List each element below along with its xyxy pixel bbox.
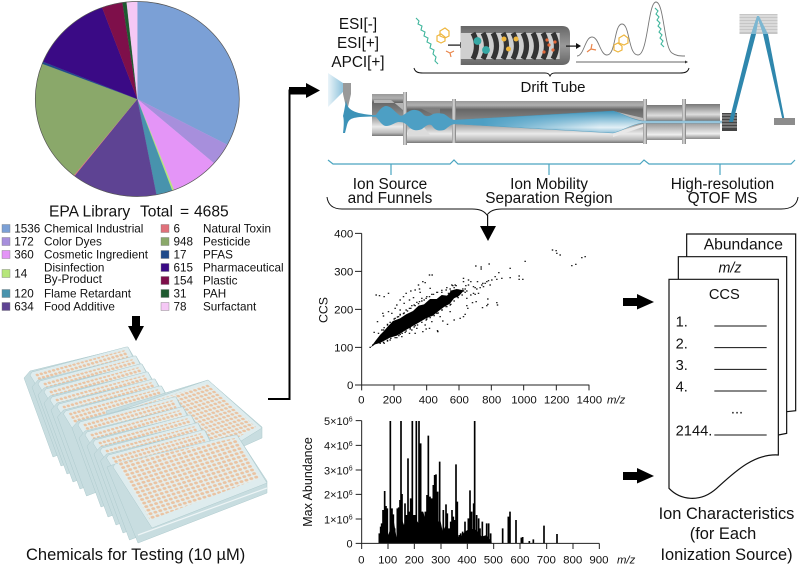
bar y labels: 6 [349,441,353,448]
legend: 1536 [14,222,40,236]
bar y labels: 4×10 [324,441,349,453]
pie chart title: Total [140,204,173,220]
region labels: High-resolution [671,176,774,193]
ionization source labels: ESI[-] [339,16,377,33]
legend: 172 [14,236,34,248]
bar y labels: 6 [349,416,353,423]
ionization source labels [331,16,385,71]
ion mobility mass spectrometer [328,14,795,145]
legend: 948 [174,236,193,248]
legend: 120 [14,288,34,300]
bar x labels: 200 [405,554,424,566]
bar y labels: 1×10 [324,514,349,526]
bar chart low envelope [379,505,492,543]
scatter x labels: 0 [358,394,365,406]
scatter y labels: 0 [347,380,353,392]
scatter y labels: 100 [334,342,353,354]
bar y labels: 6 [349,515,353,522]
legend: Color Dyes [44,236,102,248]
legend: PAH [203,288,226,300]
scatter y labels [334,228,353,392]
scatter x labels: 600 [450,394,469,406]
bar x labels: 500 [484,554,503,566]
scatter x labels: 800 [482,394,501,406]
sheet: CCS: 1. [676,315,688,331]
legend: Pharmaceutical [203,262,284,274]
sheet: CCS: ... [731,401,743,417]
pie chart title: 4685 [194,204,229,220]
sheet: CCS: 3. [676,358,688,374]
legend: Surfactant [203,300,257,314]
sheet: CCS: 4. [676,380,688,396]
arrow into tube [448,42,465,48]
arrival time distribution [576,2,688,64]
results caption: (for Each [690,525,756,543]
legend: 31 [174,288,187,300]
bar x labels: 700 [537,554,556,566]
scatter x labels: 1000 [511,394,537,406]
scatter y axis title: CCS [316,297,330,323]
ionization source labels: APCI[+] [331,54,385,71]
legend: 14 [14,268,28,280]
arrow out of tube [566,43,581,49]
scatter axes [355,233,589,390]
scatter y labels: 200 [334,304,353,316]
region labels: Separation Region [485,190,613,207]
legend: Pesticide [203,236,250,248]
bar x labels [358,554,609,566]
connector arrow: plates to instrument [268,83,320,399]
pie chart title: EPA Library [49,204,130,220]
region labels: and Funnels [348,190,433,207]
sheet: CCS: 2. [676,336,688,352]
region labels: QTOF MS [688,190,757,207]
sheet: m/z [678,257,787,435]
reflectron and TOF beam [729,14,795,125]
sheet: Abundance [687,234,796,412]
flanges [403,92,686,145]
bar y labels: 3×10 [324,465,349,477]
legend: 360 [14,248,34,262]
bar x labels: 900 [589,554,609,566]
results caption [659,505,794,564]
sheet: Abundance: Abundance [704,236,783,253]
scatter plot: CCS vs m/z [316,228,626,406]
scatter x labels: 200 [383,394,402,406]
bar y labels: 6 [349,490,353,497]
well plate stacks [24,347,267,543]
legend: 634 [14,300,34,314]
bar x labels: 300 [431,554,450,566]
bar y labels [324,416,353,551]
results caption: Ionization Source) [660,546,793,564]
bar x axis title: m/z [617,554,636,566]
sheet: CCS: 2144. [676,424,712,440]
large brace [327,197,798,215]
arrow: bars to results [623,468,654,484]
ion beam [372,106,728,133]
legend: PFAS [203,248,233,262]
bar chart: max abundance vs m/z [301,416,636,566]
ion funnels [374,100,643,137]
scatter y labels: 300 [334,266,353,278]
legend: 17 [174,248,187,262]
legend: Flame Retardant [44,288,132,300]
sheet: m/z: m/z [718,261,742,277]
arrow: library down to plates [128,316,144,341]
scatter x labels: 1400 [577,394,602,406]
TOF pusher [722,113,737,131]
bar y labels: 6 [349,466,353,473]
legend: Natural Toxin [203,222,271,236]
legend: 154 [174,274,194,288]
drift tube brace [414,68,689,76]
bar y labels: 2×10 [324,490,349,502]
sheet: CCS: CCS [709,287,740,303]
legend: Chemical Industrial [44,222,143,236]
drift tube schematic [416,2,688,65]
region bracket: teal segments [328,160,795,175]
bar x labels: 800 [563,554,582,566]
instrument body segments [372,94,403,136]
bar x labels: 400 [457,554,477,566]
region labels: Ion Mobility [510,176,588,193]
scatter x labels [358,394,602,406]
sheet: CCS [669,279,778,498]
bar x labels: 0 [358,554,365,566]
drift tube body [461,26,570,65]
scatter points [370,250,585,347]
arrow: down to plots [480,215,496,241]
bar y labels: 0 [347,539,353,551]
legend: Cosmetic Ingredient [44,248,149,262]
region labels [348,176,774,207]
drift tube label: Drift Tube [520,79,586,96]
legend [2,222,284,314]
bars [379,421,557,543]
legend: 615 [174,262,194,274]
bar y labels: 5×10 [324,416,349,428]
analyte mixture icon [416,18,454,64]
scatter dense cloud [371,289,464,347]
pie chart title: = [180,204,189,220]
ionization source labels: ESI[+] [337,35,379,52]
bar x labels: 600 [510,554,530,566]
ion source spray [328,73,372,133]
results documents [669,234,796,498]
legend: 78 [174,300,187,314]
legend: Disinfection [44,262,104,274]
scatter x labels: 400 [419,394,438,406]
bar axes [356,421,599,549]
arrow: scatter to results [623,294,654,310]
pie chart: EPA library composition [35,1,239,197]
scatter x labels: 1200 [544,394,569,406]
bar y axis title: Max Abundance [301,437,315,527]
plates caption: Chemicals for Testing (10 µM) [26,546,245,564]
legend: By-Product [44,273,103,286]
legend: Food Additive [44,300,115,314]
results caption: Ion Characteristics [659,505,794,523]
legend: 6 [174,222,180,236]
bar x labels: 100 [378,554,397,566]
legend: Plastic [203,274,238,288]
region labels: Ion Source [353,176,427,193]
scatter x axis title: m/z [607,394,626,406]
scatter y labels: 400 [334,228,353,240]
